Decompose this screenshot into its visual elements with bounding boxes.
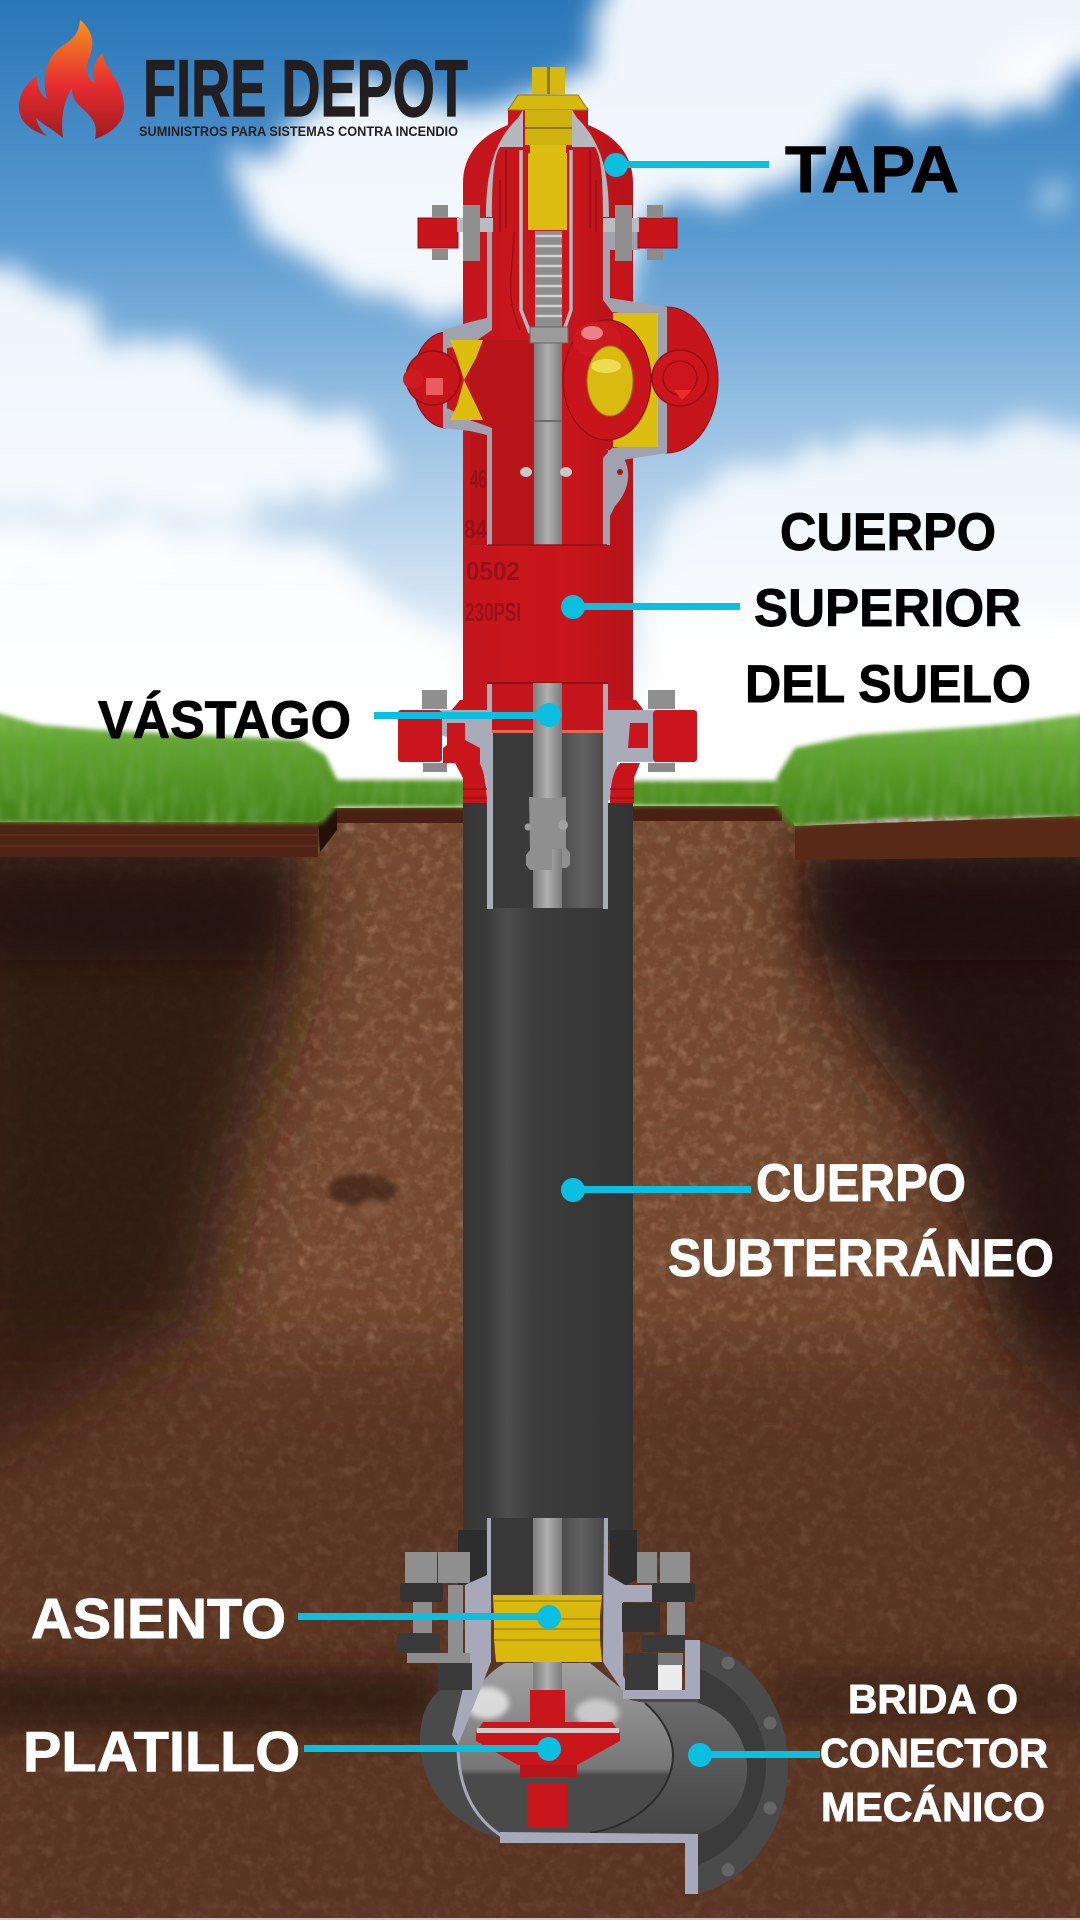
grey column and right nozzle housing	[603, 232, 667, 545]
red disc valve	[530, 1690, 565, 1723]
callout: Cuerpo subterráneo: SUBTERRÁNEO	[668, 1228, 1054, 1288]
logo: Fire Depot	[19, 20, 468, 139]
hydrant: upper red body	[403, 108, 708, 722]
grey tab	[606, 449, 628, 520]
hydrant: upper bolted flange	[418, 205, 677, 261]
callout: Brida o conector mecánico: BRIDA O	[848, 1676, 1018, 1722]
hydrant: top yellow operating nut and stem	[508, 67, 588, 343]
background: sky	[0, 0, 1080, 830]
connector flange	[420, 1640, 788, 1894]
background: clouds	[0, 0, 1080, 800]
yellow left nozzle valve	[450, 340, 483, 420]
callout: Cuerpo superior del suelo: CUERPO	[780, 503, 996, 562]
cast body markings: 0502	[466, 556, 520, 586]
callout: Asiento: ASIENTO	[31, 1587, 286, 1651]
callout: Cuerpo subterráneo: CUERPO	[756, 1154, 966, 1213]
dark inner pipe and bronze seat	[491, 1518, 604, 1596]
stem below spring	[534, 343, 562, 545]
callout: Cuerpo superior del suelo: SUPERIOR	[754, 579, 1021, 638]
callout: Platillo	[23, 1720, 561, 1784]
cast body markings: 230PSI	[465, 597, 521, 627]
hydrant: ground flange	[398, 682, 697, 803]
background: soil	[0, 806, 1080, 1920]
callout: Asiento	[31, 1587, 561, 1651]
hydrant: left nozzle disc	[413, 332, 481, 428]
bowl	[458, 1663, 673, 1833]
cast body markings: 84	[464, 514, 487, 544]
icon: flame	[19, 20, 124, 139]
callout: Cuerpo superior del suelo	[561, 503, 1031, 714]
callout: Tapa	[604, 132, 959, 206]
callout: Cuerpo superior del suelo: DEL SUELO	[745, 655, 1031, 714]
grey dome lining	[486, 110, 523, 217]
base plate and leg	[500, 1832, 698, 1894]
callout: Brida o conector mecánico: CONECTOR	[820, 1730, 1048, 1776]
callout: Brida o conector mecánico: MECÁNICO	[821, 1784, 1045, 1830]
hydrant: elbow shoe with connector flange	[397, 1518, 788, 1894]
bolts and plates	[405, 1552, 437, 1583]
logo wordmark: FIRE DEPOT	[143, 44, 468, 134]
hydrant: underground pipe and cutaway	[463, 683, 633, 1540]
hydrant: right nozzle disc	[616, 307, 718, 453]
callout: Brida o conector mecánico	[688, 1676, 1048, 1830]
callout: Vástago: VÁSTAGO	[98, 690, 351, 750]
yellow right nozzle valve	[613, 313, 658, 447]
cast body markings: 46	[470, 464, 487, 494]
logo tagline: SUMINISTROS PARA SISTEMAS CONTRA INCENDIO	[139, 124, 458, 139]
connector cylinder	[560, 1702, 747, 1835]
illustration: fire hydrant cross-section	[397, 67, 788, 1894]
callout: Vástago	[98, 690, 561, 750]
background: grass	[0, 708, 1080, 826]
grey column and left nozzle housing	[443, 232, 492, 545]
callout: Platillo: PLATILLO	[23, 1720, 300, 1784]
callout: Tapa: TAPA	[785, 132, 959, 206]
callout: Cuerpo subterráneo	[561, 1154, 1054, 1288]
cast body markings	[464, 464, 521, 627]
